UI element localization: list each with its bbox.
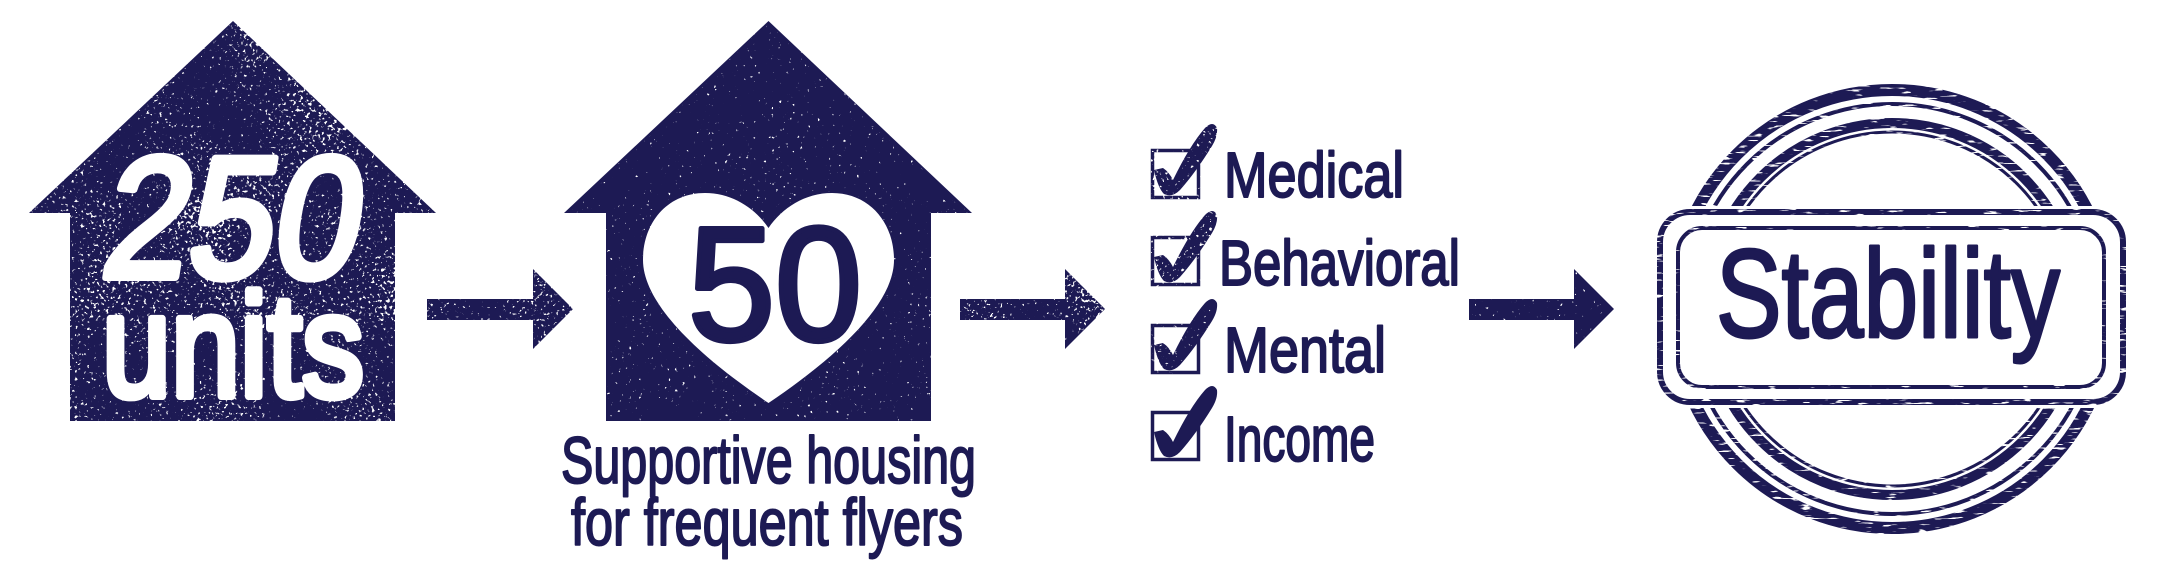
arrow: 50 to checklist bbox=[960, 269, 1106, 349]
distressed texture bbox=[29, 21, 436, 421]
checkmark wear bbox=[1151, 124, 1219, 374]
icon: heart bbox=[643, 193, 894, 403]
stamp rings bbox=[1673, 90, 2111, 528]
checkbox: medical bbox=[1152, 124, 1217, 198]
stamp wear bbox=[1656, 78, 2128, 538]
label: Stability: Stability bbox=[1716, 225, 2060, 364]
checkbox: income bbox=[1152, 386, 1217, 460]
caption: supportive housing for frequent flyers: for frequent flyers bbox=[571, 485, 963, 559]
arrow: checklist to stability bbox=[1469, 269, 1615, 349]
caption: supportive housing for frequent flyers: Supportive housing bbox=[561, 423, 976, 497]
item: Behavioral: Behavioral bbox=[1219, 227, 1460, 299]
item: Medical: Medical bbox=[1224, 139, 1404, 211]
number: 250: 250 bbox=[92, 121, 379, 314]
checkbox: mental bbox=[1152, 299, 1217, 372]
panel: 50 house with heart bbox=[564, 21, 972, 421]
label: units: units bbox=[102, 264, 364, 427]
house silhouette bbox=[564, 21, 972, 421]
caption: supportive housing for frequent flyers bbox=[561, 423, 976, 559]
panel: stability stamp bbox=[1656, 78, 2128, 538]
number: 50: 50 bbox=[688, 194, 862, 375]
item: Income: Income bbox=[1224, 403, 1375, 475]
distressed texture bbox=[564, 21, 972, 421]
panel: 250 units house bbox=[29, 21, 436, 427]
item: Mental: Mental bbox=[1224, 314, 1386, 386]
stamp banner bbox=[1656, 206, 2128, 408]
arrow: 250 units to 50 bbox=[427, 269, 573, 349]
checkbox: behavioral bbox=[1152, 211, 1217, 284]
panel: services checklist bbox=[1151, 124, 1460, 475]
house silhouette bbox=[29, 21, 436, 421]
